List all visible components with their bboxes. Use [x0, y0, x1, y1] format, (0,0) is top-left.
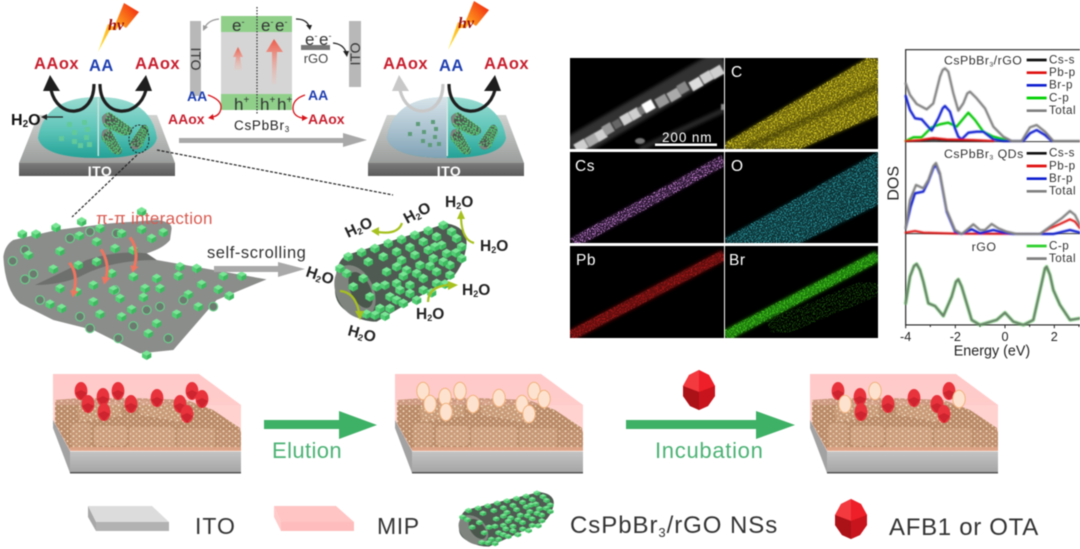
band diagram: h	[234, 95, 243, 114]
band diagram: h	[260, 95, 269, 114]
MIP device 1	[53, 374, 241, 474]
DOS legend text: 3	[989, 61, 994, 68]
labels AAox AA left: AA	[89, 57, 114, 75]
EDS panel: C map	[724, 57, 879, 150]
DOS axis labels	[885, 166, 1058, 359]
band diagram: AA	[187, 88, 207, 104]
olive arrows and H2O labels around nanotube: H	[401, 207, 419, 228]
legend: ITO: ITO	[195, 513, 236, 539]
olive arrows and H2O labels around nanotube: 2	[473, 289, 478, 299]
DOS legend text: /rGO	[994, 54, 1022, 68]
band diagram: -	[284, 17, 287, 27]
DOS legend text: C-p	[1049, 91, 1069, 104]
DOS legend text: Cs-s	[1049, 53, 1075, 66]
DOS legend text: Total	[1049, 185, 1076, 198]
DOS axis labels: Energy (eV)	[954, 343, 1030, 359]
ITO label on left device: ITO	[88, 163, 112, 179]
olive arrows and H2O labels around nanotube: 2	[427, 313, 432, 323]
olive arrows and H2O labels around nanotube: H	[416, 306, 427, 323]
DOS legend text: C-p	[1049, 239, 1069, 252]
band diagram: e	[232, 16, 241, 35]
labels AAox AA right: AAox	[383, 55, 428, 73]
rGO sheet with perovskite cubes	[3, 207, 267, 360]
lightning bolt left: hv	[108, 17, 125, 34]
DOS chart	[885, 50, 1080, 359]
ITO label on right device: ITO	[437, 163, 461, 179]
DOS legend text: Total	[1049, 252, 1076, 265]
DOS panel: CsPbBr3/rGO	[906, 68, 1080, 141]
curved arrows right	[392, 75, 501, 111]
DOS legend text: 3	[989, 155, 994, 162]
legend: AFB1 or OTA: AFB1 or OTA	[889, 514, 1039, 541]
band diagram: e	[319, 30, 328, 49]
rebound molecules device 3	[832, 382, 965, 423]
band diagram: rGO	[304, 51, 328, 66]
legend: AFB1 or OTA	[835, 499, 1039, 541]
DOS legend text: Total	[1049, 104, 1076, 117]
H2O with arrow	[11, 112, 63, 130]
labels AAox AA right: AA	[439, 57, 464, 75]
incubation label: Incubation	[655, 438, 764, 463]
H2O with arrow: 2	[23, 119, 29, 130]
legend: CsPbBr3/rGO NSs	[453, 490, 778, 548]
band diagram: e	[305, 30, 314, 49]
band diagram: ITO	[188, 47, 204, 71]
legend: CsPbBr3/rGO NSs: /rGO NSs	[667, 512, 778, 539]
olive arrows and H2O labels around nanotube	[304, 194, 508, 346]
EDS panel: Pb map: Pb	[576, 252, 596, 269]
EDS panel: Pb map	[569, 245, 725, 339]
curved arrows left	[43, 75, 152, 111]
olive arrows and H2O labels around nanotube: O	[415, 199, 434, 220]
labels AAox AA left	[34, 55, 180, 75]
target molecules device 1	[75, 382, 208, 423]
labels AAox AA left: AAox	[135, 55, 180, 73]
EDS panel: Br map	[724, 245, 879, 339]
DOS legend text: QDs	[994, 147, 1024, 161]
band diagram: AAox	[308, 111, 345, 127]
band diagram: AA	[308, 87, 328, 103]
olive arrows and H2O labels around nanotube: O	[362, 327, 378, 346]
label: self-scrolling: self-scrolling	[207, 244, 306, 262]
DOS legend text: CsPbBr	[944, 54, 989, 68]
DOS legend text: Pb-p	[1049, 159, 1076, 172]
band diagram: AAox	[168, 111, 205, 127]
labels AAox AA left: AAox	[34, 55, 79, 73]
band diagram: e	[261, 16, 270, 35]
left device: dome on ITO	[19, 97, 175, 179]
zoom dashed lines	[72, 150, 393, 217]
EDS panel: dark-field image: 200 nm	[662, 130, 712, 145]
target molecule above incubation arrow	[683, 370, 715, 410]
DOS legend text	[944, 53, 1076, 265]
band diagram: +	[243, 95, 249, 106]
EDS panel: dark-field image	[569, 57, 725, 150]
incubation arrow	[626, 411, 795, 439]
lightning bolt right: hv	[458, 15, 475, 32]
EDS panel: O map: O	[731, 158, 743, 175]
label: pi-pi interaction: π-π interaction	[96, 209, 213, 228]
band diagram: -	[328, 31, 331, 41]
DOS legend text: Br-p	[1049, 79, 1073, 92]
olive arrows and H2O labels around nanotube: 2	[356, 226, 364, 237]
imprinted cavities device 2	[417, 382, 550, 423]
legend: MIP	[274, 506, 420, 539]
band diagram: -	[241, 17, 244, 27]
legend: ITO	[88, 506, 236, 539]
olive arrows and H2O labels around nanotube: O	[478, 282, 490, 299]
band diagram: e	[275, 16, 284, 35]
olive arrows and H2O labels around nanotube: 2	[414, 211, 423, 222]
DOS legend text: Br-p	[1049, 172, 1073, 185]
olive arrows and H2O labels around nanotube: 2	[357, 332, 364, 343]
legend: CsPbBr3/rGO NSs: CsPbBr	[570, 512, 658, 539]
DOS panel: rGO	[906, 264, 1080, 325]
DOS axis labels: 2	[1051, 330, 1058, 344]
EDS panel: Cs map: Cs	[575, 158, 595, 175]
legend: CsPbBr3/rGO NSs: 3	[658, 525, 667, 540]
EDS panel: Cs map	[569, 151, 725, 244]
band diagram: +	[286, 95, 292, 106]
olive arrows and H2O labels around nanotube: O	[461, 194, 473, 211]
EDS panel: O map	[724, 151, 879, 244]
band diagram	[168, 7, 363, 134]
MIP device 2	[395, 374, 583, 474]
DOS panel: CsPbBr3 QDs	[906, 163, 1080, 234]
MIP device 3	[810, 374, 998, 474]
band diagram: -	[270, 17, 273, 27]
right device: dome on ITO	[368, 97, 524, 179]
olive arrows and H2O labels around nanotube: H	[346, 322, 361, 342]
legend: MIP: MIP	[377, 513, 420, 539]
olive arrows and H2O labels around nanotube: 2	[491, 245, 496, 255]
big gray arrow	[179, 133, 367, 147]
DOS axis labels: -4	[900, 330, 911, 344]
olive arrows and H2O labels around nanotube: H	[480, 238, 491, 255]
lightning bolt left	[98, 3, 139, 52]
DOS legend text: CsPbBr	[944, 147, 989, 161]
olive arrows and H2O labels around nanotube: O	[357, 214, 375, 235]
labels AAox AA right	[383, 55, 529, 75]
olive arrows and H2O labels around nanotube: O	[319, 269, 336, 289]
gray arrow self-scrolling	[214, 262, 305, 277]
elution arrow	[264, 411, 377, 439]
scrolled nanotube	[326, 220, 467, 325]
band diagram: h	[277, 95, 286, 114]
DOS axis labels: 0	[1001, 330, 1009, 344]
EDS panel: Br map: Br	[729, 252, 746, 269]
DOS axis labels: DOS	[885, 166, 902, 201]
band diagram: 3	[285, 125, 290, 134]
DOS axis labels: -2	[950, 330, 961, 344]
band diagram: ITO	[347, 42, 363, 66]
olive arrows and H2O labels around nanotube: H	[462, 282, 473, 299]
DOS legend text: rGO	[972, 240, 996, 254]
olive arrows and H2O labels around nanotube: H	[343, 221, 360, 242]
labels AAox AA right: AAox	[484, 55, 529, 73]
DOS legend text: Cs-s	[1049, 147, 1075, 160]
DOS legend text: Pb-p	[1049, 66, 1076, 79]
olive arrows and H2O labels around nanotube: 2	[314, 274, 322, 285]
olive arrows and H2O labels around nanotube: O	[432, 306, 444, 323]
olive arrows and H2O labels around nanotube: 2	[456, 201, 461, 211]
lightning bolt right	[448, 1, 489, 50]
H2O with arrow: H	[11, 112, 23, 129]
EDS panel: C map: C	[731, 64, 742, 81]
olive arrows and H2O labels around nanotube: H	[445, 194, 456, 211]
elution label: Elution	[272, 438, 342, 463]
band diagram: -	[314, 31, 317, 41]
olive arrows and H2O labels around nanotube: O	[496, 238, 508, 255]
H2O with arrow: O	[28, 112, 41, 129]
band diagram: +	[269, 95, 275, 106]
band diagram: CsPbBr	[234, 118, 285, 133]
DOS legend lines	[1027, 60, 1047, 259]
olive arrows and H2O labels around nanotube: H	[304, 264, 320, 283]
